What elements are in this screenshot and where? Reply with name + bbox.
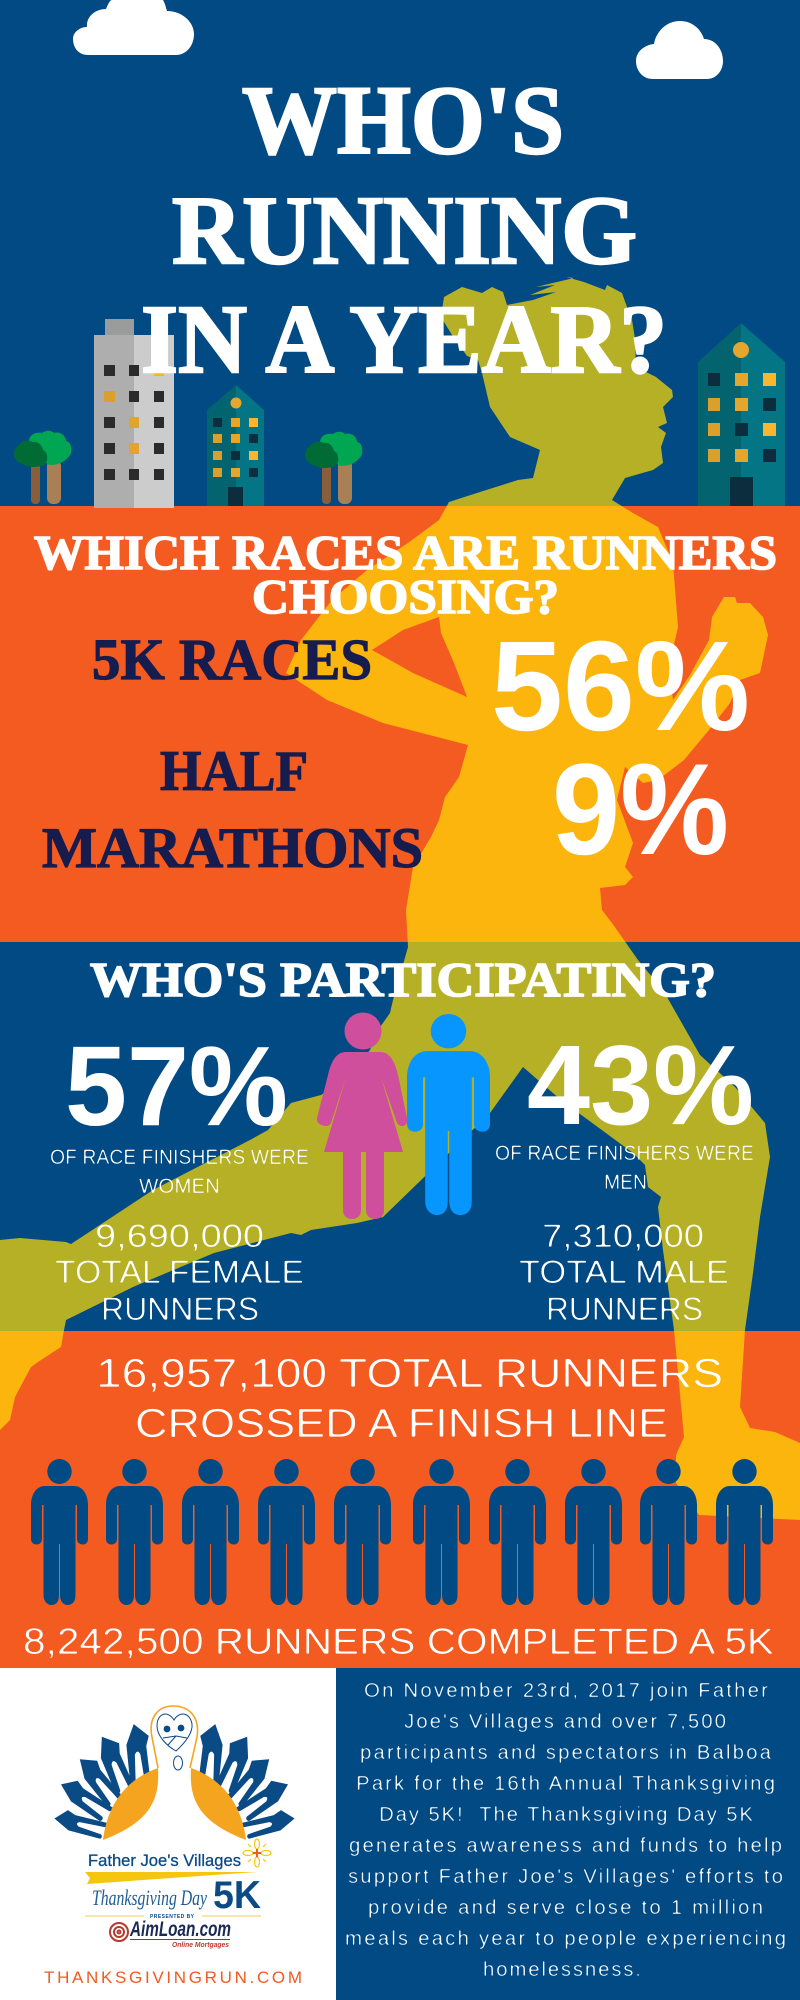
- link text: thanksgivingrun.com: THANKSGIVINGRUN.COM: [44, 1968, 302, 1987]
- text block: event description: support Father Joe's Villages' efforts to: [348, 1865, 783, 1888]
- text block: event description: meals each year to people experiencing: [345, 1927, 786, 1950]
- text block: event description: participants and spectators in Balboa: [360, 1741, 772, 1764]
- stat: 43 percent men: TOTAL MALE: [519, 1254, 729, 1290]
- panel: logo background: [0, 1668, 336, 2000]
- logo: Father Joe's Villages Thanksgiving Day 5K: [52, 1706, 297, 1949]
- icon: turkey feathers right: [193, 1722, 297, 1840]
- panel: total runners background: [0, 1331, 800, 1668]
- text block: event description: generates awareness and funds to help: [349, 1834, 782, 1857]
- logo text: AimLoan.com: AimLoan.com: [129, 1918, 231, 1941]
- icon: cloud right: [636, 21, 723, 79]
- icon: turkey feathers left: [52, 1722, 156, 1840]
- icon: turkey wings: [103, 1768, 246, 1840]
- icon: cloud left: [73, 0, 194, 55]
- heading: total runners crossed a finish line: 16,957,100 TOTAL RUNNERS: [96, 1350, 723, 1396]
- runner silhouette: [0, 277, 800, 1520]
- panel: description background: [336, 1668, 800, 2000]
- stat: 57 percent women: RUNNERS: [101, 1291, 259, 1327]
- title: WHO'S: [242, 67, 564, 175]
- stat: 57 percent women: [50, 1023, 309, 1327]
- heading: which races are runners choosing: CHOOSING?: [252, 569, 559, 624]
- stat: 43 percent men: [495, 1022, 754, 1327]
- stat: 57 percent women: WOMEN: [139, 1175, 220, 1198]
- text block: event description: Park for the 16th Annual Thanksgiving: [356, 1772, 775, 1795]
- pictogram: row of ten runners: [31, 1459, 773, 1605]
- text block: event description: [345, 1679, 786, 1981]
- stat: 43 percent men: RUNNERS: [546, 1291, 703, 1327]
- icon: woman figure: [317, 1012, 407, 1219]
- icon: trees left: [14, 431, 71, 504]
- stat: 43 percent men: 43%: [527, 1022, 754, 1148]
- icon: flower mark: [243, 1839, 271, 1867]
- logo text: 5K: 5K: [213, 1874, 261, 1917]
- stat: 43 percent men: OF RACE FINISHERS WERE: [495, 1142, 754, 1165]
- icon: grey tower building: [94, 319, 174, 508]
- icon: yellow ribbon: [85, 1872, 257, 1884]
- heading: total runners crossed a finish line: CROSSED A FINISH LINE: [135, 1400, 668, 1446]
- title: [141, 67, 667, 394]
- stat: 57 percent women: 9,690,000: [95, 1218, 264, 1254]
- icon: turkey head: [151, 1706, 198, 1770]
- text block: event description: Joe's Villages and over 7,500: [404, 1710, 726, 1733]
- heading: total runners crossed a finish line: [96, 1350, 723, 1446]
- stat: 43 percent men: 7,310,000: [542, 1218, 704, 1254]
- logo text: presented by: PRESENTED BY: [150, 1914, 195, 1920]
- stat value: 9 percent: 9%: [552, 736, 729, 882]
- text block: event description: On November 23rd, 2017 join Father: [364, 1679, 768, 1702]
- text: runners completed a 5K: 8,242,500 RUNNERS COMPLETED A 5K: [23, 1621, 774, 1662]
- text block: event description: Day 5K! The Thanksgiving Day 5K: [379, 1803, 753, 1826]
- stat value: 56 percent: 56%: [491, 615, 750, 758]
- logo text: online mortgages: [130, 1940, 230, 1949]
- logo text: Father Joe's Villages: Father Joe's Villages: [88, 1851, 241, 1870]
- icon: small teal building: [207, 385, 264, 506]
- stat label: half marathons: MARATHONS: [42, 817, 423, 880]
- stat: 57 percent women: 57%: [65, 1023, 288, 1149]
- icon: trees middle: [305, 432, 362, 504]
- stat: 57 percent women: TOTAL FEMALE: [55, 1254, 304, 1290]
- heading: which races are runners choosing: [34, 525, 777, 624]
- heading: who's participating: WHO'S PARTICIPATING?: [90, 952, 716, 1007]
- title: RUNNING: [172, 177, 637, 285]
- icon: target: [110, 1923, 128, 1941]
- text block: event description: provide and serve close to 1 million: [368, 1896, 763, 1919]
- icon: large teal building: [698, 323, 785, 506]
- panel: which races background: [0, 506, 800, 942]
- panel: who's participating background: [0, 942, 800, 1331]
- stat label: half marathons: [42, 740, 423, 880]
- logo text: Thanksgiving Day: Thanksgiving Day: [92, 1885, 207, 1910]
- stat label: half marathons: HALF: [160, 740, 308, 803]
- heading: which races are runners choosing: WHICH RACES ARE RUNNERS: [34, 525, 777, 580]
- stat: 57 percent women: OF RACE FINISHERS WERE: [50, 1146, 309, 1169]
- icon: man figure: [407, 1014, 490, 1215]
- title: IN A YEAR?: [141, 286, 667, 394]
- panel: sky header background: [0, 0, 800, 506]
- stat: 43 percent men: MEN: [604, 1171, 647, 1194]
- stat label: 5K races: 5K RACES: [92, 627, 372, 692]
- text block: event description: homelessness.: [483, 1958, 641, 1981]
- logo text: online mortgages: Online Mortgages: [172, 1942, 229, 1949]
